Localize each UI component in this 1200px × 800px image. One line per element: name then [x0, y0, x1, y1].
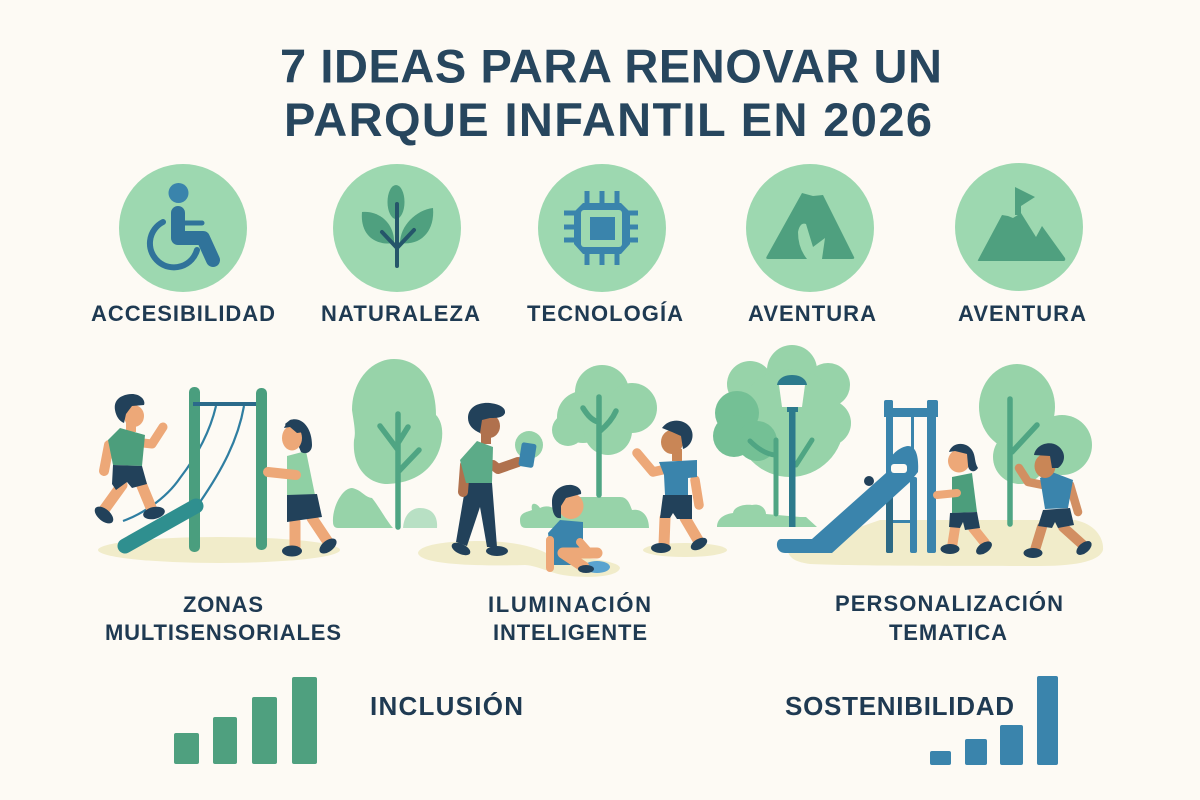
child with hand on post	[268, 419, 339, 556]
label: iluminacion inteligente: INTELIGENTE	[493, 620, 647, 645]
child with hand on tree	[1019, 443, 1094, 558]
label: personalizacion tematica	[835, 591, 1063, 645]
icon: naturaleza plant	[333, 164, 461, 292]
right tree	[979, 364, 1092, 524]
label: iluminacion inteligente: ILUMINACIÓN	[488, 592, 651, 617]
icon: aventura mountain flag	[955, 163, 1083, 291]
scene: personalizacion tematica	[713, 345, 1103, 566]
label: zonas multisensoriales: MULTISENSORIALES	[105, 620, 341, 645]
back trees	[713, 345, 851, 527]
icon: tecnologia chip	[538, 164, 666, 292]
title	[280, 40, 942, 146]
label: naturaleza: NATURALEZA	[321, 301, 480, 326]
child waving	[637, 421, 709, 553]
swing frame	[189, 387, 267, 552]
ground	[418, 541, 620, 577]
slide	[125, 506, 196, 546]
tree and bush	[520, 365, 657, 528]
label: accesibilidad: ACCESIBILIDAD	[91, 301, 275, 326]
label: inclusion: INCLUSIÓN	[370, 691, 523, 721]
street lamp	[777, 375, 807, 527]
label: aventura 1: AVENTURA	[748, 301, 876, 326]
ground	[788, 520, 1103, 566]
bar chart: sostenibilidad	[930, 676, 1058, 765]
label: zonas multisensoriales	[105, 592, 341, 645]
label: aventura 2: AVENTURA	[958, 301, 1086, 326]
label: personalizacion tematica: TEMATICA	[889, 620, 1007, 645]
label: sostenibilidad: SOSTENIBILIDAD	[785, 691, 1014, 721]
child with phone	[450, 403, 543, 558]
blue slide tower	[777, 400, 938, 553]
child near slide	[937, 444, 994, 557]
child walking	[92, 394, 166, 527]
icon: accesibilidad wheelchair	[119, 164, 247, 292]
label: personalizacion tematica: PERSONALIZACIÓN	[835, 591, 1063, 616]
label: tecnologia: TECNOLOGÍA	[527, 301, 683, 326]
child sitting	[548, 485, 610, 573]
label: zonas multisensoriales: ZONAS	[183, 592, 263, 617]
scene: zonas multisensoriales	[92, 359, 442, 563]
title: PARQUE INFANTIL EN 2026	[284, 93, 932, 146]
bar chart: inclusion	[174, 677, 317, 764]
label: iluminacion inteligente	[488, 592, 651, 645]
title: 7 IDEAS PARA RENOVAR UN	[280, 40, 942, 92]
tree	[333, 359, 442, 528]
scene: iluminacion inteligente	[418, 365, 727, 577]
icon: aventura volcano	[746, 164, 874, 292]
ground	[98, 537, 340, 563]
swing ropes	[123, 406, 244, 521]
